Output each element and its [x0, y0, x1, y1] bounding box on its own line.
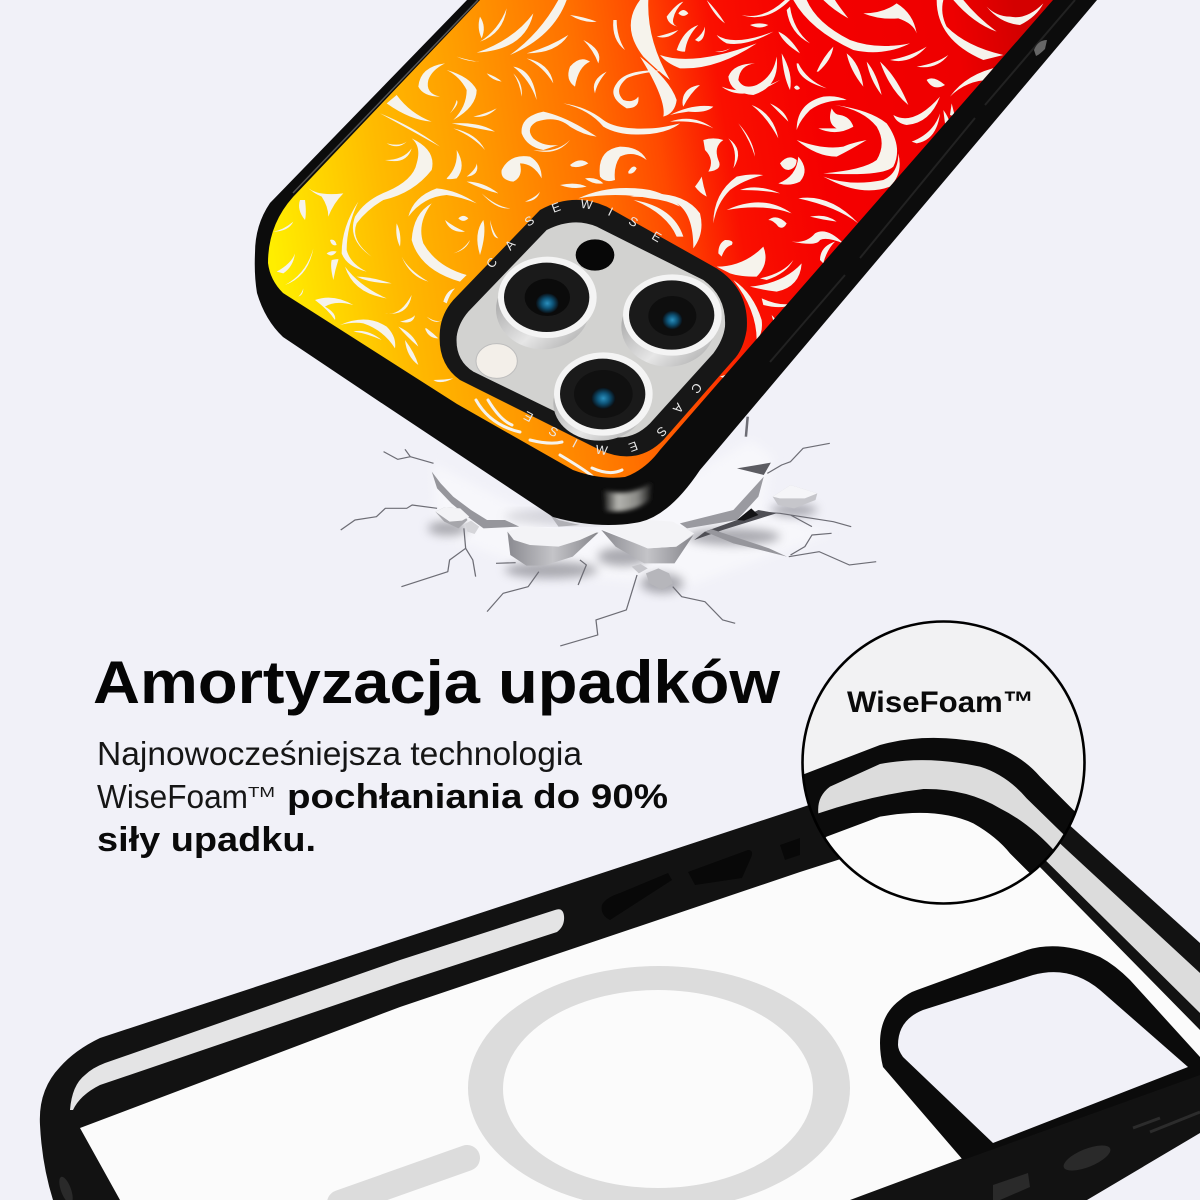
icon: camera cutout	[576, 239, 614, 271]
case back gradient	[268, 0, 1053, 478]
body text: pochłaniania do 90%	[287, 778, 668, 816]
camera opening	[880, 946, 1200, 1160]
brand ring lettering: I	[570, 437, 580, 451]
magnet bar	[340, 1158, 467, 1200]
brand ring lettering: E	[521, 408, 536, 425]
bumper close-up	[804, 738, 1074, 902]
brand ring lettering: W	[595, 443, 609, 458]
icon: lens two	[621, 274, 722, 367]
phone with decorated case	[255, 0, 1097, 525]
brand ring lettering: A	[670, 400, 686, 416]
illustration: cracked ground	[341, 417, 876, 646]
brand ring lettering: S	[653, 423, 669, 439]
swirl pattern	[273, 0, 1043, 476]
brand ring lettering: I	[606, 205, 615, 219]
brand ring lettering: E	[649, 229, 664, 245]
brand ring lettering: A	[502, 237, 519, 253]
side buttons	[602, 838, 800, 920]
foam strip: right side	[1025, 825, 1200, 1013]
case shell	[255, 0, 1097, 525]
brand ring lettering: C	[484, 255, 500, 271]
brand ring lettering: E	[550, 200, 562, 216]
foam strip: long side	[70, 909, 564, 1110]
brand ring lettering: C	[688, 380, 705, 396]
brand ring lettering: S	[522, 213, 537, 229]
brand ring lettering: E	[627, 438, 640, 454]
clear back panel	[80, 824, 1200, 1200]
magnetic ring	[468, 966, 850, 1200]
body text	[97, 735, 668, 859]
charging ports	[57, 1140, 1114, 1200]
title: Amortyzacja upadków	[93, 649, 780, 716]
brand ring lettering: S	[546, 424, 560, 440]
icon: flash	[476, 344, 517, 378]
camera island with lenses	[440, 197, 747, 458]
callout label: WiseFoam™	[847, 686, 1034, 719]
magnified detail circle	[801, 620, 1086, 905]
brand ring lettering: W	[580, 197, 594, 212]
body text: Najnowocześniejsza technologia	[97, 735, 583, 772]
clear case with black bumper	[40, 742, 1200, 1200]
icon: lens three	[553, 352, 653, 441]
brand ring lettering	[484, 197, 705, 458]
icon: lens one	[496, 257, 597, 349]
body text: WiseFoam	[97, 778, 248, 815]
brand ring lettering: S	[626, 214, 640, 230]
body text: TM	[248, 784, 275, 801]
body text: siły upadku.	[97, 821, 316, 859]
